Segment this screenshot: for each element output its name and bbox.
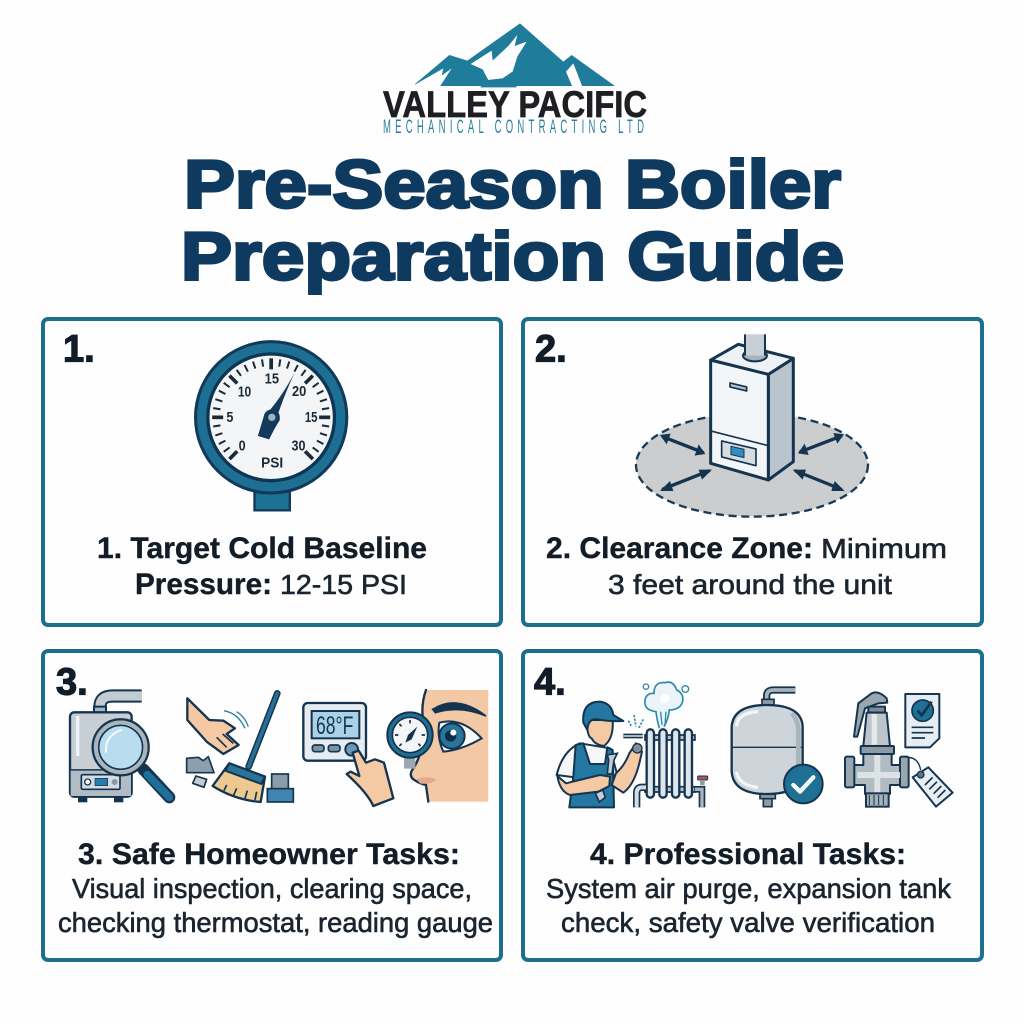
- caption 2: [546, 532, 947, 600]
- panel 1 border: [43, 319, 501, 625]
- step number 3: 3.: [56, 662, 88, 704]
- caption 4: check, safety valve verification: [561, 907, 935, 938]
- caption 2: 3 feet around the unit: [608, 569, 892, 600]
- icon: clearing space with broom: [187, 693, 277, 802]
- panel: step 1 target pressure: [43, 319, 501, 625]
- caption 1: [97, 532, 427, 601]
- caption 3: checking thermostat, reading gauge: [58, 907, 493, 938]
- caption 4: [546, 838, 952, 938]
- icon: pressure gauge: 15: [305, 409, 317, 426]
- icon: pressure gauge: 15: [265, 370, 279, 387]
- panel: step 2 clearance zone: [523, 319, 982, 625]
- icon: pressure gauge: 30: [291, 438, 305, 455]
- icon: safety valve with document and tag: [845, 692, 953, 807]
- icon: pressure gauge: 20: [292, 383, 306, 400]
- logo: Valley Pacific: [383, 23, 647, 138]
- caption 4: 4. Professional Tasks:: [590, 838, 906, 871]
- logo wordmark: VALLEY PACIFIC: [383, 84, 647, 125]
- panel: step 3 homeowner tasks: [43, 651, 501, 960]
- icon: boiler with clearance zone: [636, 334, 868, 517]
- step number 2: 2.: [535, 328, 567, 370]
- icon: pressure gauge: 0: [239, 438, 246, 455]
- icon: pressure gauge: 5: [226, 409, 233, 426]
- icon: thermostat: 68°F: [316, 713, 353, 740]
- caption 1: 1. Target Cold Baseline: [97, 532, 427, 565]
- logo subtitle: MECHANICAL CONTRACTING LTD: [383, 117, 644, 138]
- title: Preparation Guide: [181, 218, 844, 294]
- step number 4: 4.: [534, 662, 566, 704]
- title: [181, 146, 844, 294]
- panel: step 4 professional tasks: [523, 651, 982, 960]
- icon: radiator air purge: [623, 682, 708, 807]
- icon: thermostat: [303, 703, 393, 806]
- caption 3: 3. Safe Homeowner Tasks:: [78, 838, 460, 871]
- caption 4: System air purge, expansion tank: [546, 873, 952, 904]
- caption 1: 12-15 PSI: [280, 569, 407, 600]
- caption 3: [58, 838, 493, 938]
- caption 2: Minimum: [821, 533, 947, 564]
- caption 1: Pressure:: [135, 568, 272, 601]
- icon: eye reading gauge: [387, 690, 488, 802]
- panel 2 border: [523, 319, 982, 625]
- title: Pre-Season Boiler: [184, 146, 841, 222]
- panel 4 border: [523, 651, 982, 960]
- icon: expansion tank with check: [732, 690, 823, 807]
- icon: boiler inspection with magnifier: [70, 696, 169, 802]
- icon: pressure gauge: 10: [238, 384, 251, 401]
- caption 2: 2. Clearance Zone:: [546, 532, 813, 565]
- icon: mountain: [415, 23, 615, 87]
- icon: pressure gauge: PSI: [261, 454, 283, 471]
- caption 3: Visual inspection, clearing space,: [72, 873, 472, 904]
- panel 3 border: [43, 651, 501, 960]
- icon: technician with wrench: [557, 702, 642, 807]
- icon: debris box: [267, 774, 293, 802]
- icon: pressure gauge: [195, 342, 347, 510]
- step number 1: 1.: [63, 328, 95, 370]
